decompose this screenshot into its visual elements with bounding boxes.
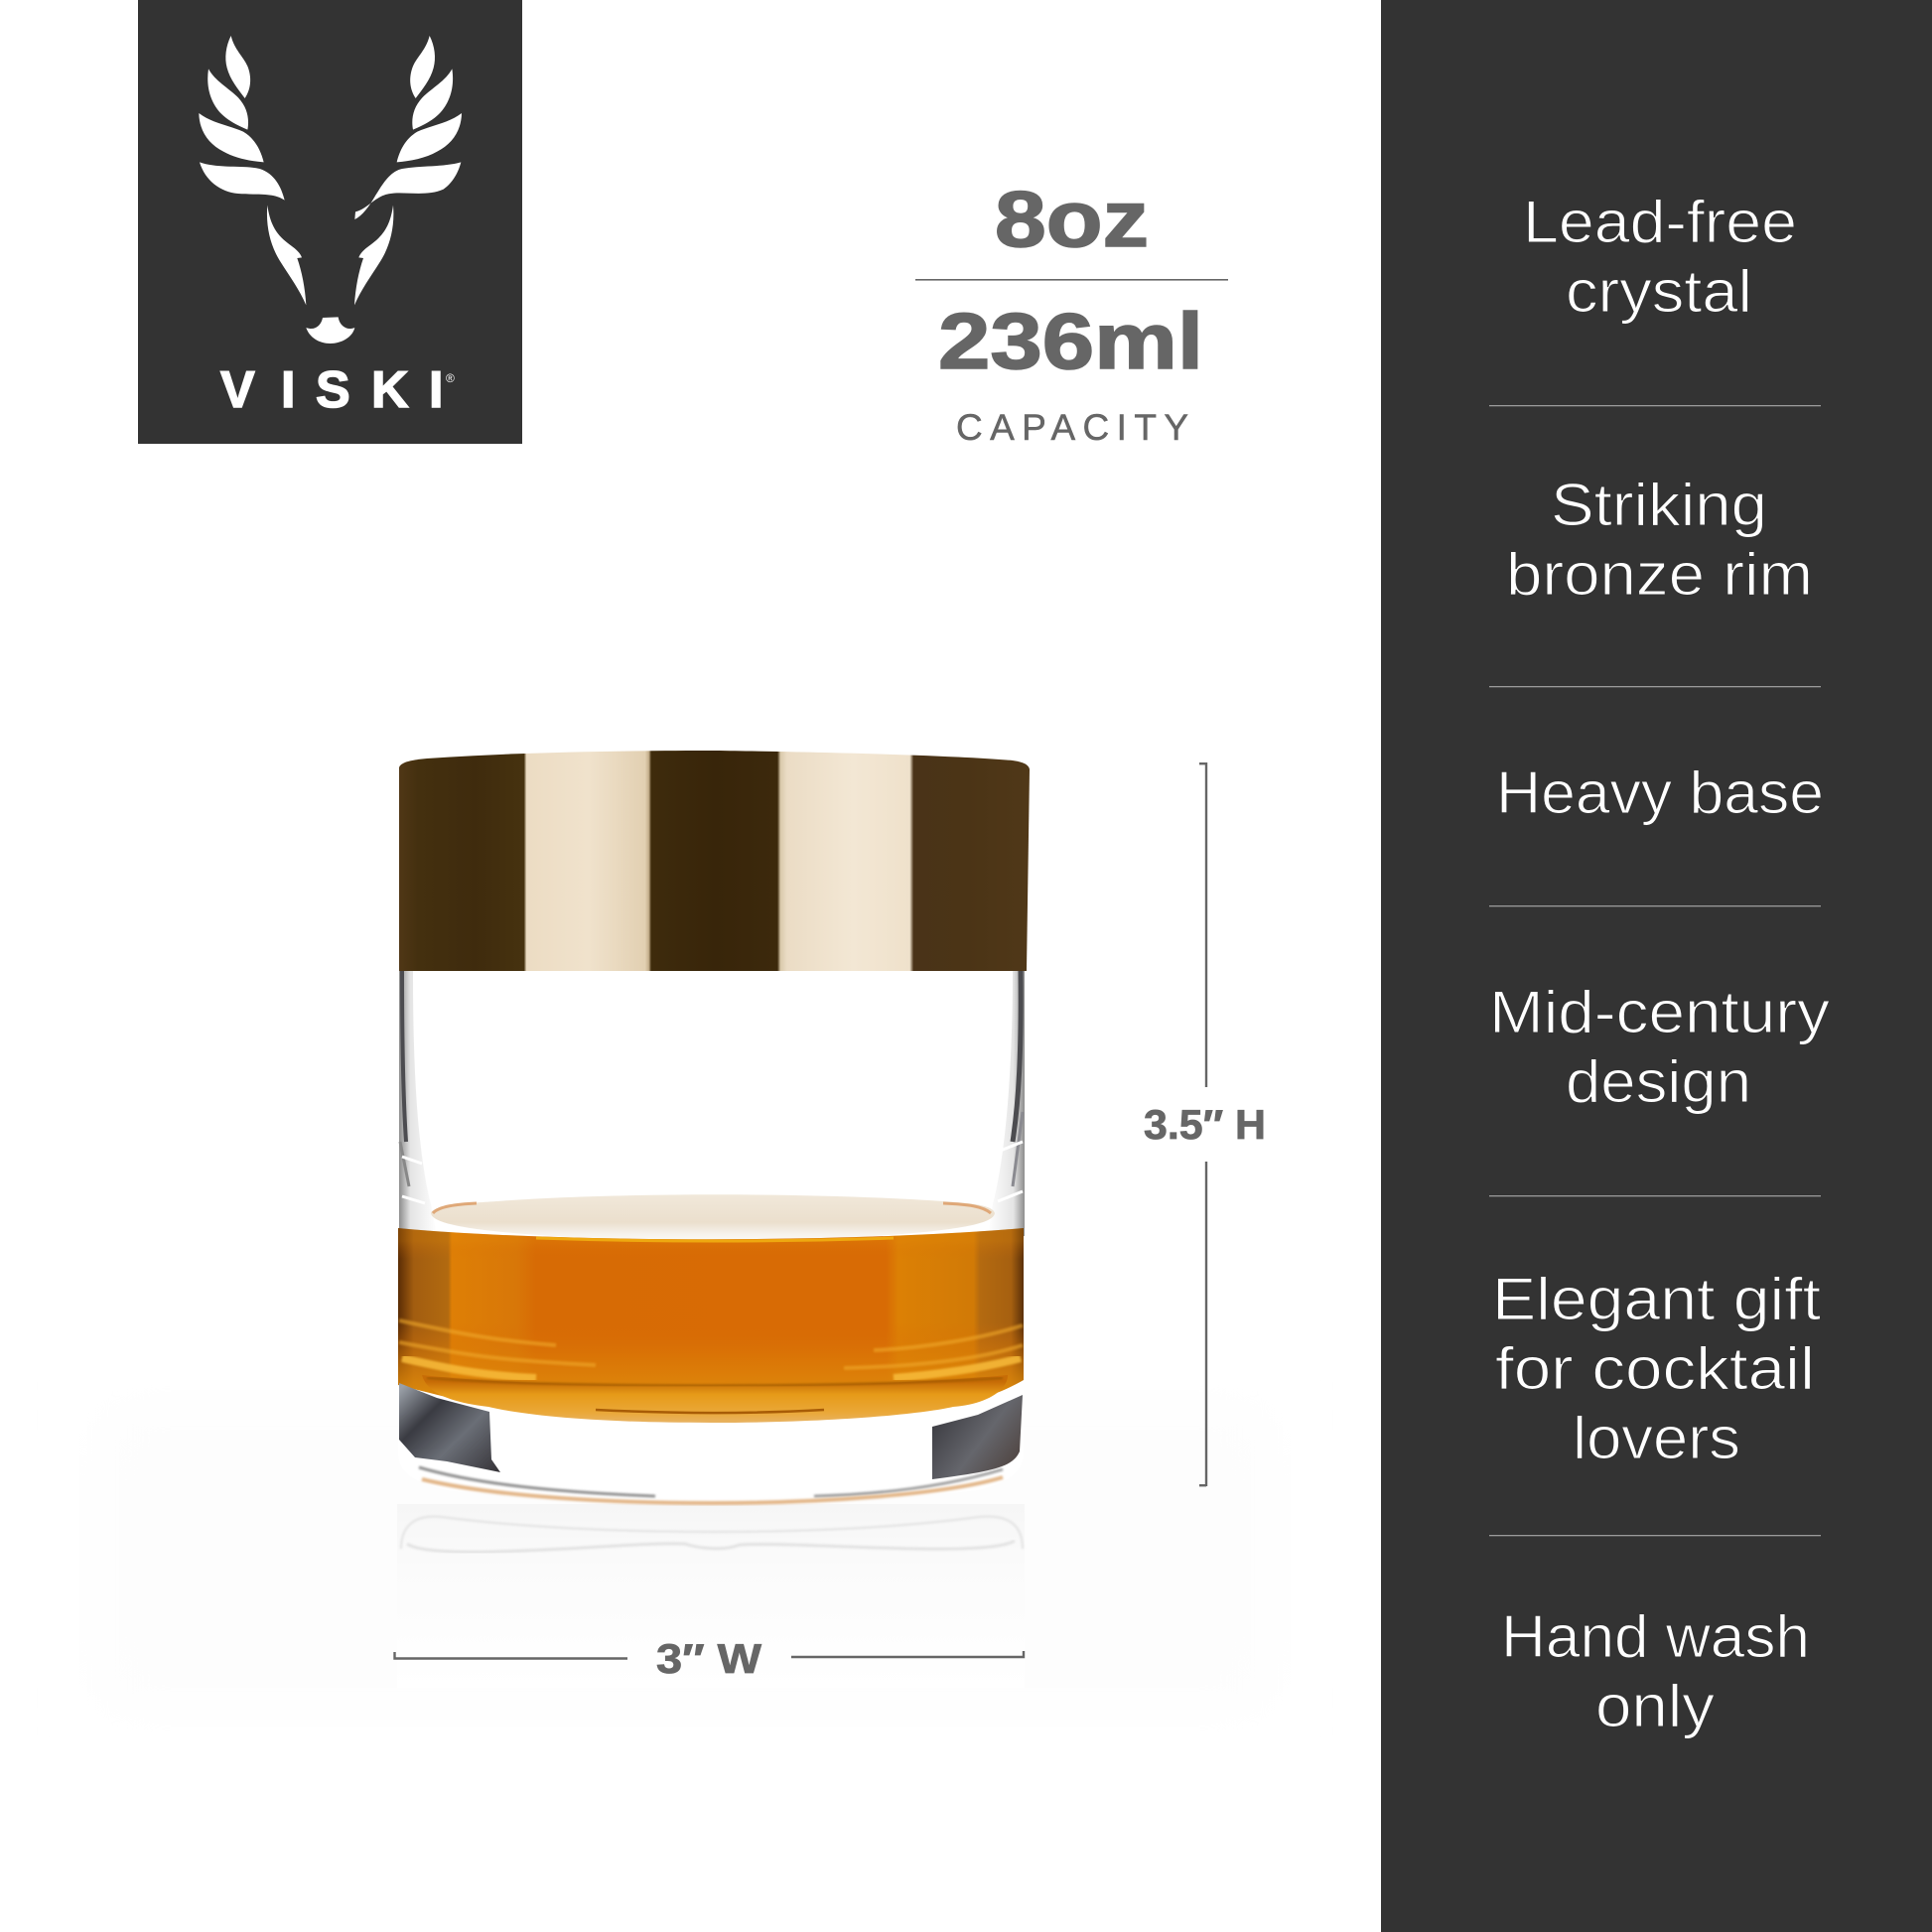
bronze rim [399,751,1030,971]
feature: mid-century design: Mid-century [1489,979,1830,1045]
feature: hand wash only [1501,1603,1810,1739]
feature: elegant gift: Elegant gift [1492,1266,1821,1332]
whiskey liquid [398,1228,1024,1406]
feature: heavy base: Heavy base [1496,759,1824,826]
feature: elegant gift: lovers [1573,1405,1740,1471]
feature: bronze rim: bronze rim [1506,541,1813,608]
panel: features [1381,0,1932,1932]
whiskey lower crescent [422,1375,1008,1423]
feature: lead-free crystal: crystal [1566,258,1752,325]
capacity block [915,175,1228,448]
feature: hand wash only: only [1595,1673,1715,1739]
capacity in ounces: 8oz [995,175,1149,263]
feature: lead-free crystal [1523,189,1797,325]
whiskey glass [398,751,1030,1503]
feature: mid-century design: design [1566,1048,1751,1115]
capacity label: CAPACITY [956,407,1188,448]
width label: 3″ W [656,1635,761,1682]
registered mark: ® [446,371,455,385]
glass floor disk [431,1194,995,1243]
logo wordmark: VISKI [220,361,443,419]
feature: hand wash only: Hand wash [1501,1603,1810,1670]
logo panel [138,0,522,444]
capacity in millilitres: 236ml [938,297,1203,385]
feature: mid-century design [1489,979,1830,1115]
glass reflection [397,1504,1025,1688]
feature: bronze rim: Striking [1551,472,1767,538]
feature: bronze rim [1506,472,1813,608]
height label: 3.5″ H [1144,1101,1266,1148]
feature: lead-free crystal: Lead-free [1523,189,1797,255]
dimension: width [395,1635,1024,1682]
clear glass base [398,1380,1024,1503]
feature: elegant gift: for cocktail [1495,1335,1815,1402]
clear glass body [399,971,1026,1241]
feature: elegant gift [1492,1266,1821,1471]
icon: stag antlers and nose [199,36,462,344]
